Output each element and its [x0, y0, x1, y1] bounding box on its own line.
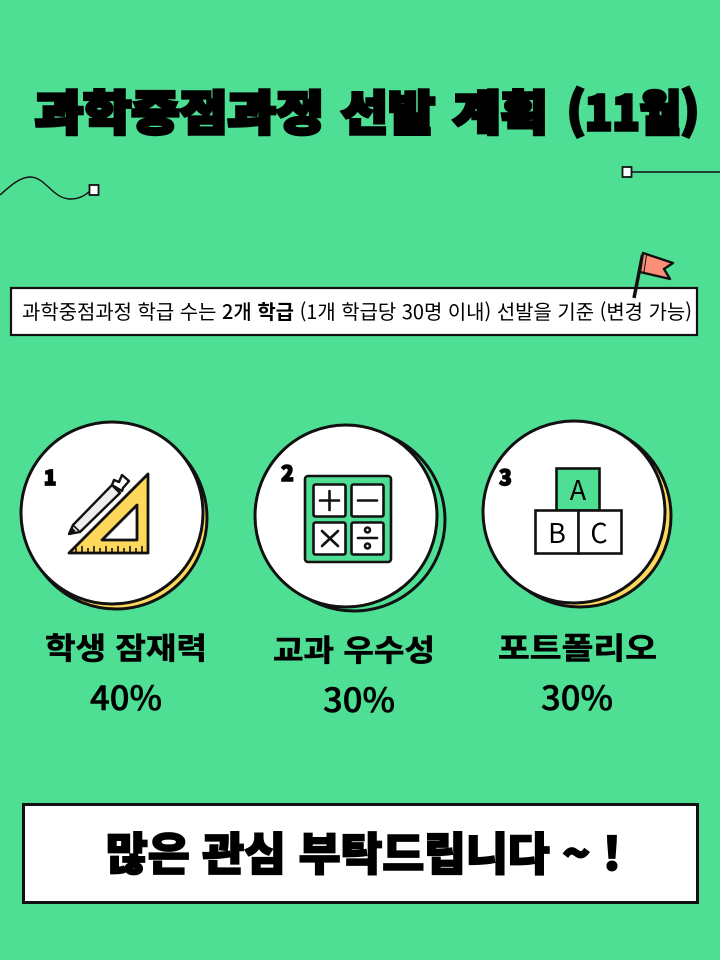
circle with shadow: [255, 425, 445, 611]
decoration: straight line with square: [622, 167, 720, 177]
icon: alphabet blocks: C: [590, 512, 608, 551]
info box text: 과학중점과정 학급 수는 2개 학급 (1개 학급당 30명 이내) 선발을 기준 (변경 가능): [22, 296, 692, 325]
label: 포트폴리오: [498, 624, 657, 668]
info box: [11, 288, 697, 335]
title: 과학중점과정: [35, 75, 324, 144]
title: 계획: [453, 75, 548, 144]
circle with shadow: [483, 421, 671, 607]
label: 교과 우수성: [273, 626, 435, 670]
percent: 30%: [323, 674, 395, 722]
panel: subject excellence: [255, 425, 445, 722]
closing banner: [24, 804, 698, 902]
icon: alphabet blocks: A: [570, 469, 587, 508]
number 2: 2: [281, 458, 294, 488]
label: 학생 잠재력: [45, 624, 207, 668]
title: 선발: [341, 75, 435, 144]
closing banner text: 많은 관심 부탁드립니다 ~ !: [106, 818, 621, 883]
icon: calculator: [305, 476, 391, 562]
number 3: 3: [499, 462, 512, 492]
number 1: 1: [44, 462, 56, 491]
panel: portfolio: [483, 421, 671, 720]
icon: flag: [634, 253, 673, 298]
percent: 40%: [90, 672, 162, 720]
icon: alphabet blocks: [536, 468, 622, 554]
circle with shadow: [21, 422, 207, 609]
percent: 30%: [541, 672, 613, 720]
title: [35, 75, 699, 144]
decoration: wavy line with square: [0, 177, 98, 199]
icon: ruler and pencil: [69, 474, 148, 553]
panel: student potential: [21, 422, 207, 720]
title: (11월): [567, 75, 699, 144]
icon: alphabet blocks: B: [548, 512, 566, 551]
